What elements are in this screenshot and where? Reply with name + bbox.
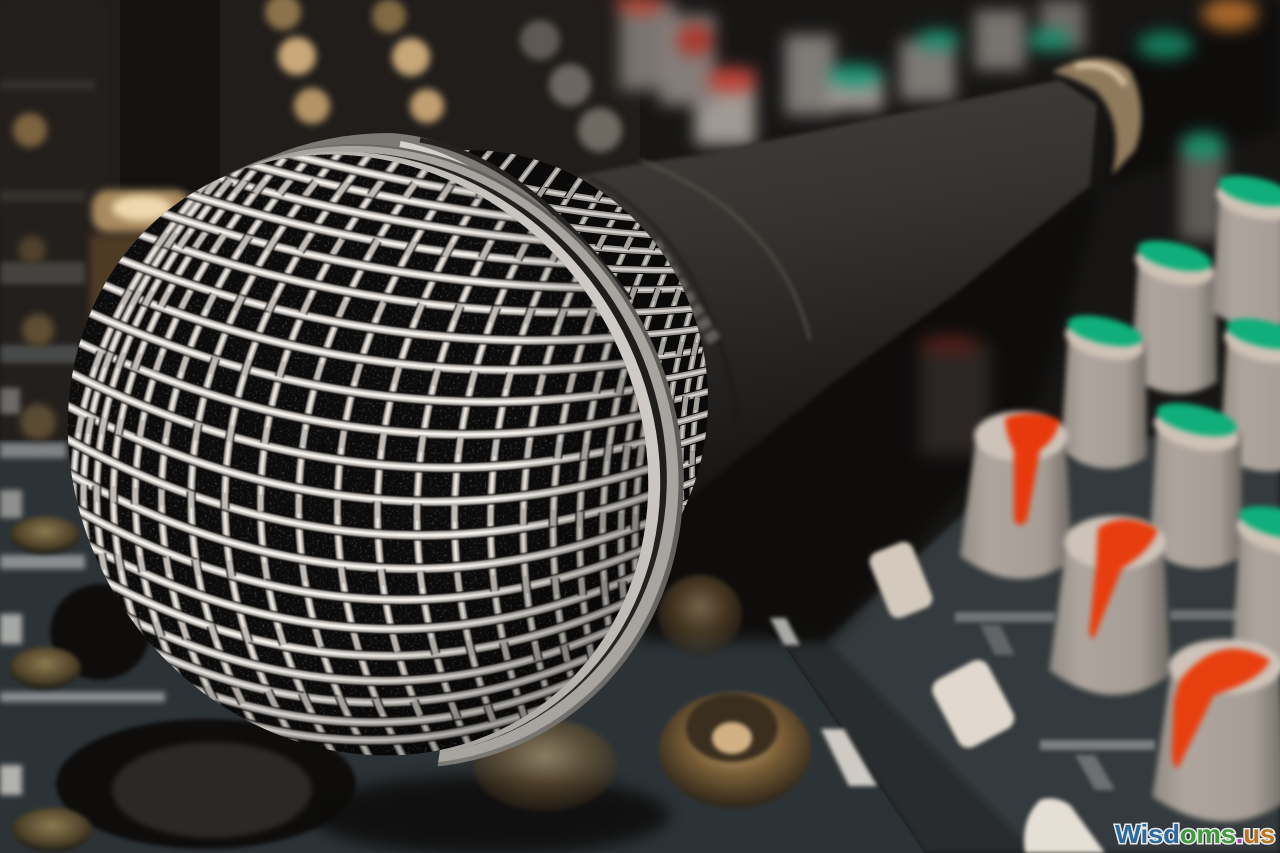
bokeh lights bbox=[13, 0, 622, 440]
microphone grille: rear section bbox=[464, 150, 708, 514]
red knobs bbox=[960, 411, 1280, 822]
green knobs bbox=[1061, 170, 1280, 672]
watermark: Wisdoms.us: Wisdoms.us bbox=[1115, 819, 1275, 849]
left panel strips bbox=[0, 0, 165, 795]
gold jack connectors bbox=[473, 575, 811, 811]
gold blurred fitting, upper left bbox=[90, 190, 190, 325]
microphone grille: front wire mesh bbox=[68, 154, 648, 756]
shadow beneath microphone head bbox=[310, 775, 670, 853]
microphone rear gold collar bbox=[1052, 58, 1141, 175]
microphone grille: silver ring bbox=[224, 133, 684, 766]
microphone body bbox=[555, 80, 1097, 500]
gold screws bbox=[9, 516, 92, 852]
white fader caps bbox=[867, 539, 1105, 853]
console printed markings bbox=[770, 610, 1240, 790]
jack socket rings bbox=[50, 584, 356, 849]
blurred knobs, back row bbox=[615, 0, 1258, 455]
